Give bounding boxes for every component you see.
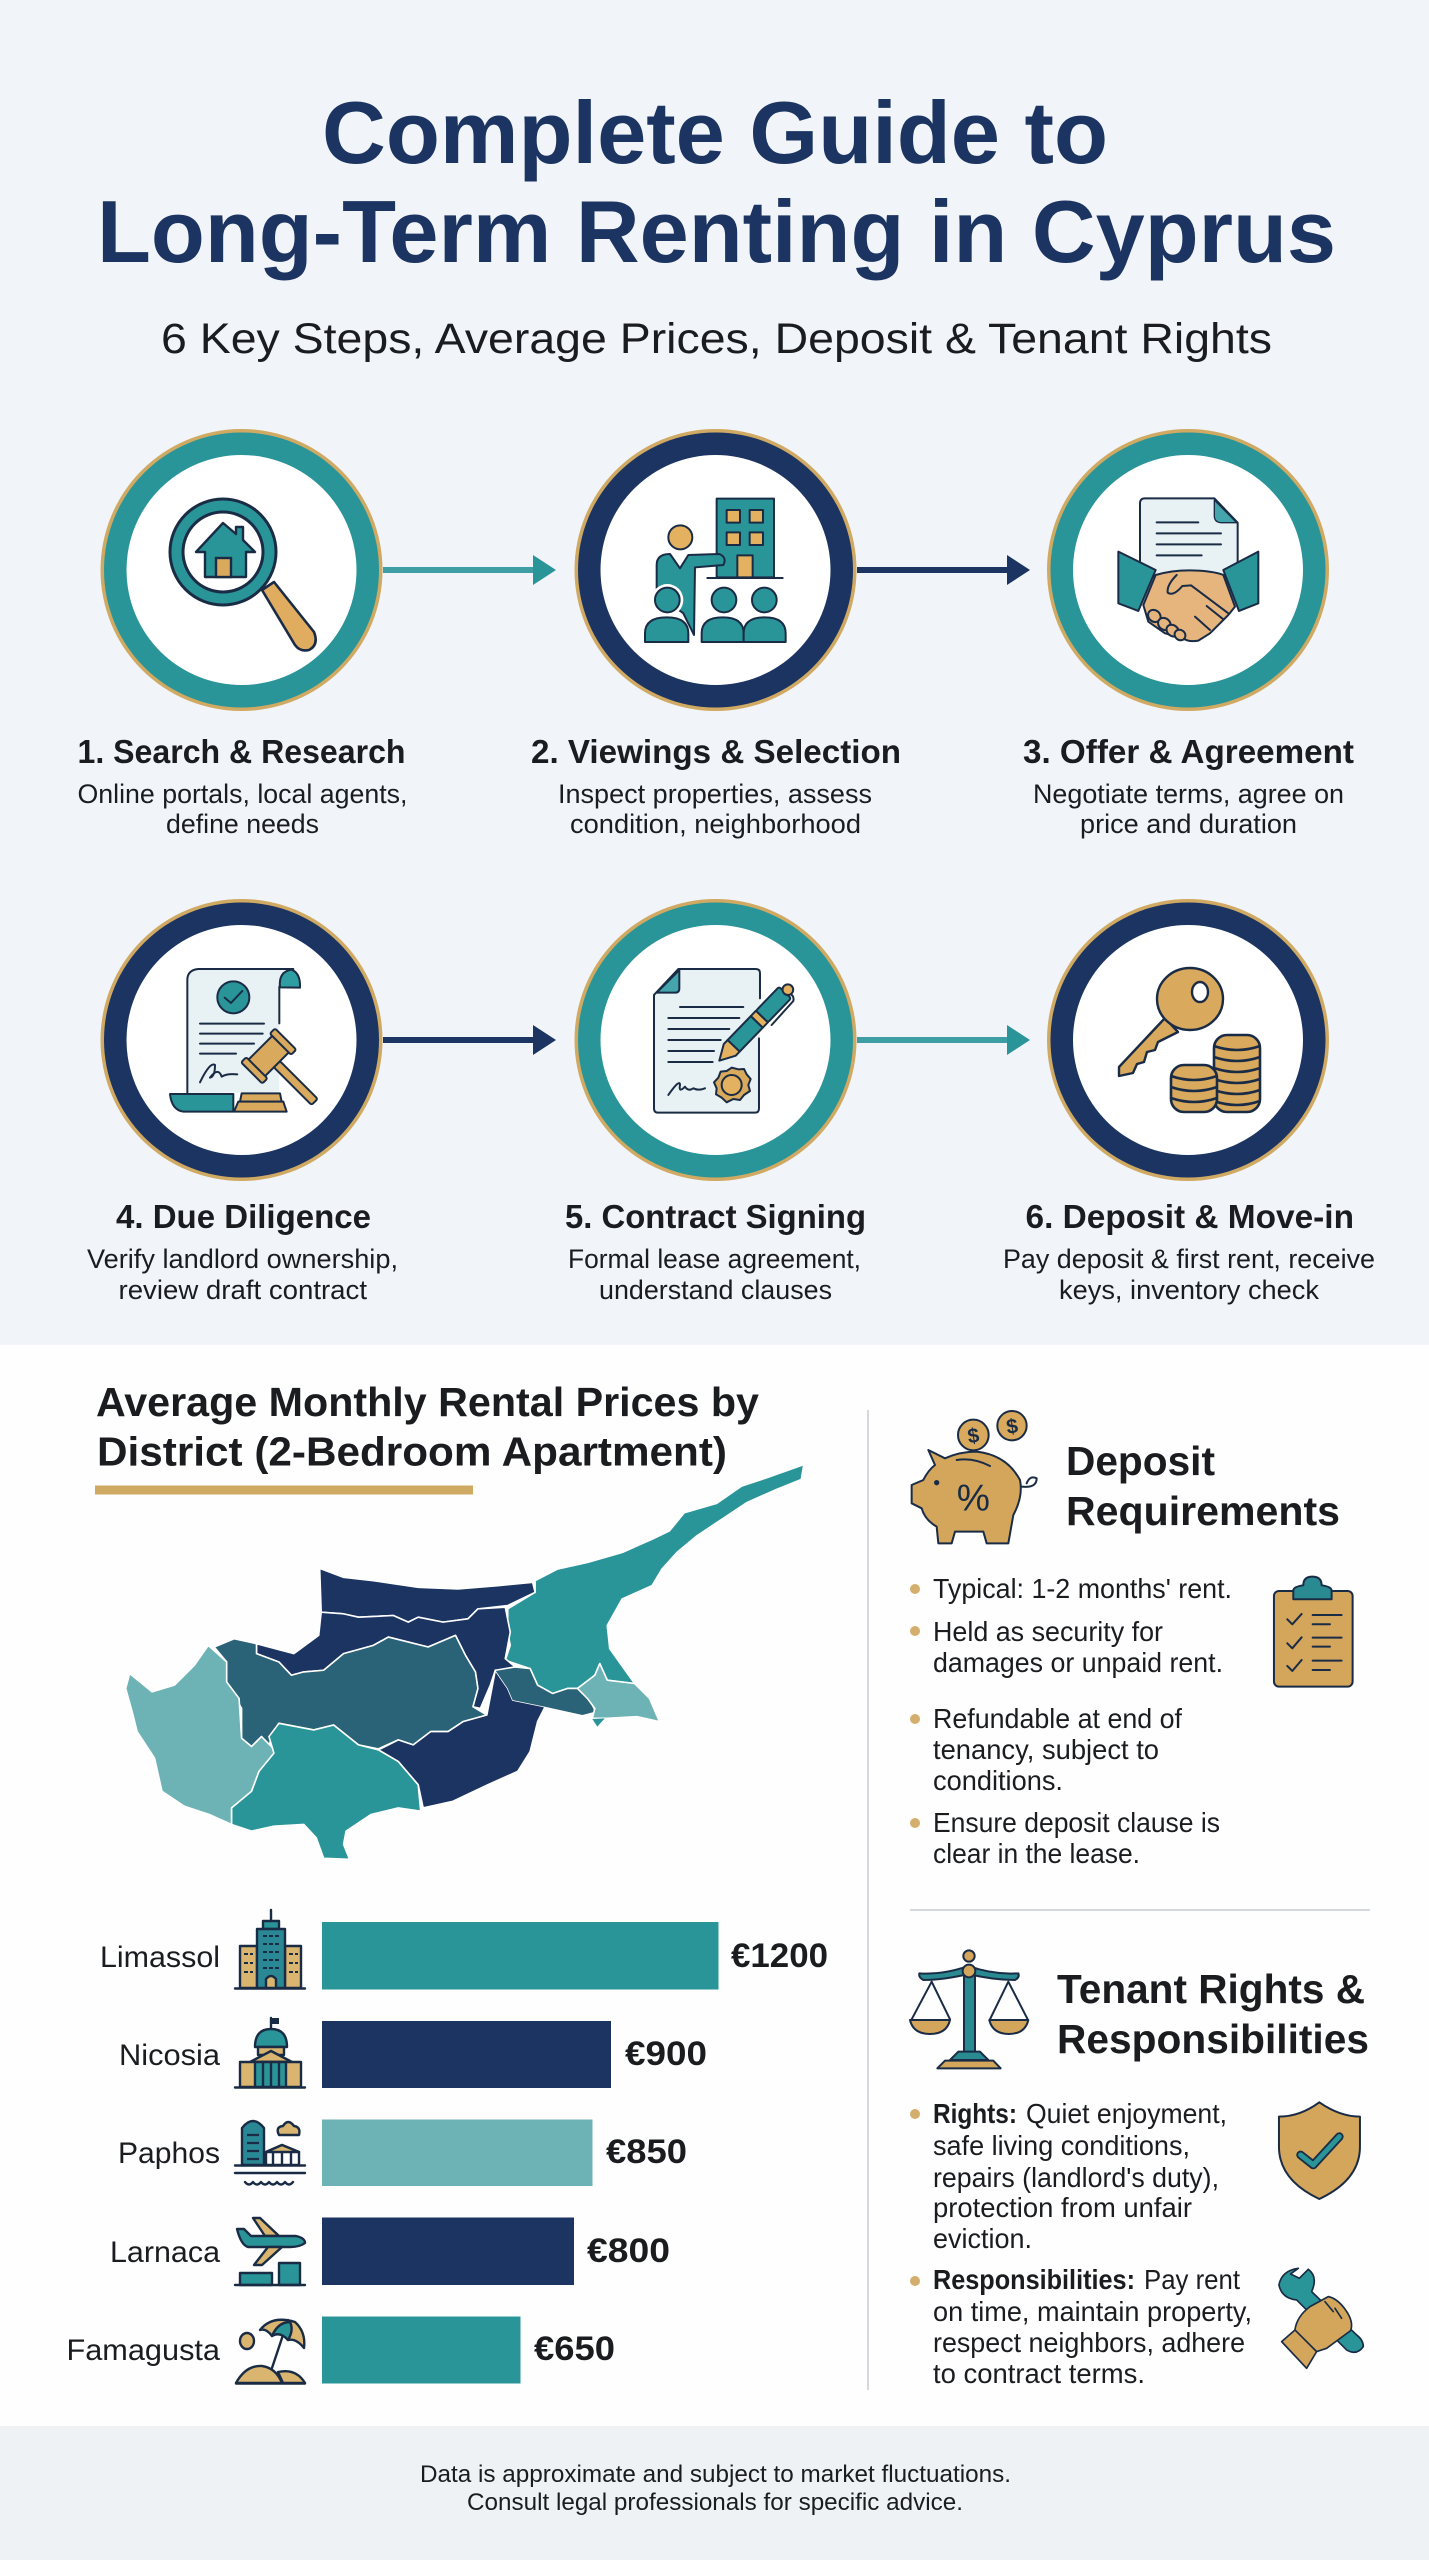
tenant rights bullet list [910,2098,1252,2389]
icon: magnifying glass with house [170,499,316,650]
icon: government building [235,2018,305,2088]
step 4 description: review draft contract [118,1275,368,1305]
step 5 heading: 5. Contract Signing [565,1198,866,1235]
step 4 ring [100,899,382,1181]
deposit bullet list: Ensure deposit clause is [933,1807,1220,1838]
step 2 description: condition, neighborhood [570,809,861,839]
deposit bullet list: Refundable at end of [933,1703,1182,1734]
row: Famagusta [66,2316,615,2384]
rental prices heading [95,1379,759,1494]
icon: shield with check [1279,2102,1360,2199]
icon: agent showing building to group [643,499,786,643]
tenant rights bullet list: safe living conditions, [933,2130,1190,2161]
panel: step 2 viewings and selection [531,429,901,839]
step 5 description: Formal lease agreement, [568,1244,861,1274]
icon: piggy bank with coins: % [957,1477,990,1519]
deposit heading [1066,1438,1340,1534]
step 3 heading: 3. Offer & Agreement [1023,733,1354,770]
panel: rental prices [66,1379,828,2384]
step 1 description: Online portals, local agents, [78,779,408,809]
row: Larnaca: Larnaca [110,2236,220,2269]
step 6 ring [1047,899,1329,1181]
step 1 ring [100,429,382,711]
step 2 description [558,779,872,839]
tenant rights bullet list: Pay rent [1144,2264,1240,2295]
step 4 description [87,1244,398,1305]
title: Long-Term Renting in Cyprus [97,182,1336,281]
footer disclaimer: Consult legal professionals for specific advice. [467,2489,963,2516]
row: Famagusta: Famagusta [66,2334,220,2367]
row: Paphos [118,2120,687,2186]
deposit heading: Deposit [1066,1438,1215,1484]
icon: document with gavel [170,969,332,1119]
row: Larnaca [110,2218,670,2285]
icon: piggy bank with coins [912,1411,1037,1543]
tenant rights bullet list: eviction. [933,2223,1032,2254]
deposit bullet list: damages or unpaid rent. [933,1647,1223,1678]
arrow: step 2 to 3 [857,555,1030,585]
tenant rights bullet list: Quiet enjoyment, [1026,2098,1227,2129]
step 1 description: define needs [166,809,319,839]
tenant rights bullet list: Responsibilities: [933,2264,1135,2295]
step 5 description: understand clauses [599,1275,832,1305]
icon: hand holding wrench [1279,2268,1363,2368]
step 3 description [1033,779,1344,839]
bar chart: prices by district [66,1910,828,2384]
row: Limassol: Limassol [100,1941,220,1974]
deposit heading: Requirements [1066,1488,1340,1534]
step 4 description: Verify landlord ownership, [87,1244,398,1274]
rental prices heading: District (2-Bedroom Apartment) [97,1428,727,1474]
step 2 ring [574,429,856,711]
arrow: step 5 to 6 [857,1025,1030,1055]
row: Limassol: €1200 [731,1937,828,1975]
row: Nicosia: €900 [625,2035,707,2073]
deposit bullet list: tenancy, subject to [933,1734,1159,1765]
panel: step 6 deposit and move-in [1003,899,1375,1305]
step 6 description [1003,1244,1375,1305]
tenant rights bullet list: on time, maintain property, [933,2296,1252,2327]
deposit bullet list: Held as security for [933,1616,1163,1647]
step 2 heading: 2. Viewings & Selection [531,733,901,770]
panel: footer [0,2426,1429,2560]
row: Nicosia [119,2018,707,2088]
icon: city towers [235,1910,305,1988]
step 3 ring [1047,429,1329,711]
deposit bullet list [910,1573,1232,1869]
step 1 description [78,779,408,839]
step 1 heading: 1. Search & Research [78,733,406,770]
icon: key and coins [1119,968,1260,1112]
row: Paphos: €850 [606,2133,687,2171]
step 3 description: price and duration [1080,809,1297,839]
step 3 description: Negotiate terms, agree on [1033,779,1344,809]
row: Larnaca: €800 [587,2232,670,2270]
row: Nicosia: Nicosia [119,2039,220,2072]
footer disclaimer: Data is approximate and subject to market fluctuations. [420,2461,1011,2488]
panel: step 1 search and research [78,429,408,839]
subtitle: 6 Key Steps, Average Prices, Deposit & Tenant Rights [161,315,1272,363]
header [97,83,1336,363]
panel: deposit requirements [910,1411,1353,1869]
step 6 description: Pay deposit & first rent, receive [1003,1244,1375,1274]
tenant rights bullet list: to contract terms. [933,2358,1145,2389]
deposit bullet list: clear in the lease. [933,1838,1140,1869]
step 5 description [568,1244,861,1305]
row: Limassol [100,1910,828,1990]
step 6 description: keys, inventory check [1059,1275,1320,1305]
title [97,83,1336,281]
rental prices heading: Average Monthly Rental Prices by [96,1379,759,1425]
icon: scales of justice [910,1950,1028,2068]
panel: tenant rights and responsibilities [910,1950,1369,2389]
tenant rights bullet list: repairs (landlord's duty), [933,2162,1219,2193]
deposit bullet list: conditions. [933,1765,1063,1796]
icon: airplane and airport [235,2218,305,2285]
icon: piggy bank with coins: $ [966,1424,981,1448]
panel: step 4 due diligence [87,899,398,1305]
icon: beach umbrella [236,2320,305,2384]
tenant rights heading: Responsibilities [1057,2016,1369,2062]
arrow: step 4 to 5 [383,1025,556,1055]
tenant rights bullet list: protection from unfair [933,2192,1192,2223]
arrow: step 1 to 2 [383,555,556,585]
row: Paphos: Paphos [118,2137,220,2170]
panel: step 5 contract signing [565,899,866,1305]
tenant rights heading: Tenant Rights & [1057,1966,1365,2012]
step 4 heading: 4. Due Diligence [116,1198,371,1235]
tenant rights bullet list: Rights: [933,2098,1017,2129]
icon: clipboard checklist [1274,1577,1353,1687]
step 2 description: Inspect properties, assess [558,779,872,809]
tenant rights bullet list: respect neighbors, adhere [933,2327,1245,2358]
tenant rights heading [1057,1966,1369,2062]
step 5 ring [574,899,856,1181]
icon: contract with pen and seal [654,969,798,1113]
row: Famagusta: €650 [534,2330,615,2368]
footer disclaimer [420,2461,1011,2516]
vertical divider [867,1410,869,2390]
title: Complete Guide to [322,83,1108,182]
horizontal divider [910,1909,1370,1911]
icon: handshake with document [1118,498,1258,642]
icon: seaside buildings [235,2121,305,2184]
step 6 heading: 6. Deposit & Move-in [1026,1198,1354,1235]
icon: piggy bank with coins: $ [1005,1415,1020,1439]
panel: step 3 offer and agreement [1023,429,1354,839]
map of Cyprus districts [126,1465,804,1859]
panel: white lower section [0,1345,1429,2426]
deposit bullet list: Typical: 1-2 months' rent. [933,1573,1232,1604]
